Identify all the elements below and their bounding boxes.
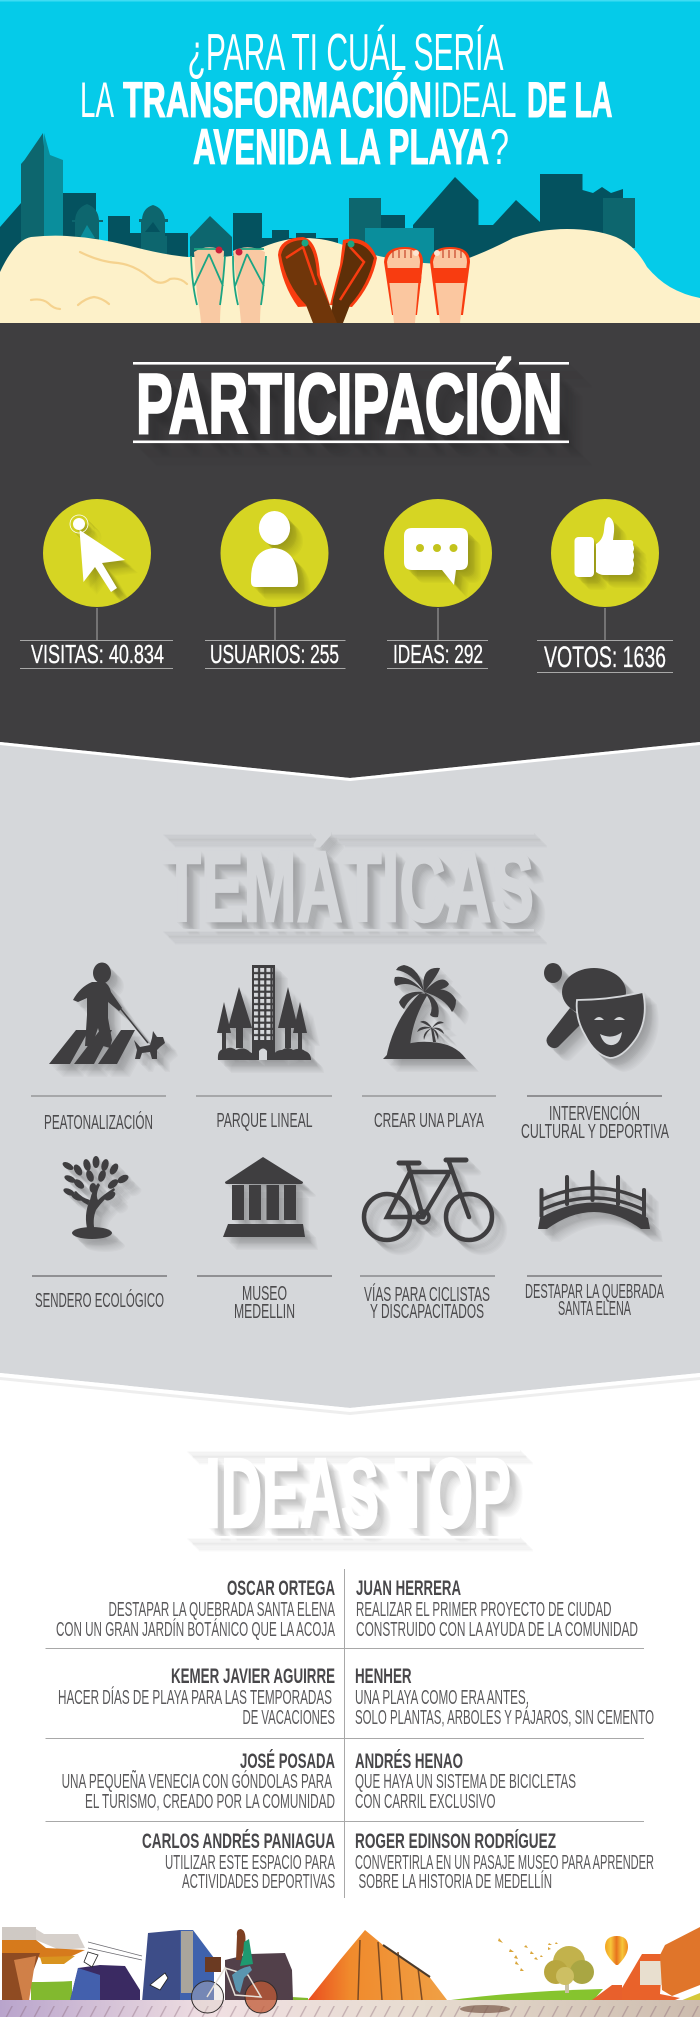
stat: visitas — [20, 499, 173, 669]
sand ripples — [31, 252, 187, 309]
idea: henher: HENHER — [355, 1665, 412, 1688]
orange building — [308, 1930, 447, 2000]
feet: red sandals — [384, 247, 470, 323]
topic: museo medellín: MEDELLIN — [234, 1301, 295, 1323]
idea: josé posada — [62, 1750, 335, 1813]
topic: peatonalización: PEATONALIZACIÓN — [44, 1111, 153, 1134]
orange buildings right — [588, 1927, 700, 2010]
panel: participación background — [0, 323, 700, 778]
topic: vías para ciclistas — [360, 1160, 495, 1323]
stat: ideas — [384, 499, 492, 669]
icon: palm island — [383, 965, 466, 1059]
section edge shadow — [0, 1378, 700, 1413]
icon: cursor — [70, 515, 125, 592]
idea: oscar ortega: CON UN GRAN JARDÍN BOTÁNICO QUE LA ACOJA — [56, 1618, 335, 1641]
idea: oscar ortega: DESTAPAR LA QUEBRADA SANTA ELENA — [108, 1599, 335, 1621]
icon: tower with trees — [217, 965, 311, 1060]
idea: kemer javier aguirre: HACER DÍAS DE PLAYA PARA LAS TEMPORADAS — [58, 1686, 332, 1709]
grass — [31, 1981, 603, 2008]
stat: ideas: IDEAS: 292 — [393, 639, 483, 669]
hot air balloon — [605, 1936, 628, 1965]
idea: andrés henao: CON CARRIL EXCLUSIVO — [355, 1791, 496, 1813]
idea: henher: UNA PLAYA COMO ERA ANTES, — [355, 1687, 529, 1709]
title question: ? — [490, 119, 509, 175]
topic: sendero ecológico: SENDERO ECOLÓGICO — [35, 1289, 164, 1312]
idea: carlos andrés paniagua — [142, 1830, 335, 1893]
topic: parque lineal: PARQUE LINEAL — [216, 1110, 312, 1132]
panel: ideas table grid — [46, 1569, 644, 1898]
title question: LA — [80, 72, 114, 128]
idea: carlos andrés paniagua: UTILIZAR ESTE ESPACIO PARA — [165, 1852, 335, 1874]
topic: intervención cultural y deportiva — [521, 963, 669, 1143]
idea: kemer javier aguirre: KEMER JAVIER AGUIRRE — [171, 1665, 335, 1688]
illustration: city collage footer — [0, 1927, 700, 2017]
topic: parque lineal — [196, 965, 332, 1132]
cobblestone ground — [0, 2000, 700, 2017]
idea: kemer javier aguirre: DE VACACIONES — [242, 1707, 335, 1729]
topic: vías para ciclistas: VÍAS PARA CICLISTAS — [364, 1283, 490, 1306]
topic: vías para ciclistas: Y DISCAPACITADOS — [370, 1301, 484, 1323]
tree — [544, 1946, 594, 1993]
topic: crear una playa — [362, 965, 496, 1132]
title question: IDEAL — [433, 72, 516, 128]
icon: pedestrian with dog — [49, 962, 165, 1064]
topic: destapar la quebrada — [525, 1172, 664, 1320]
topic: sendero ecológico — [32, 1156, 167, 1312]
title question: DE LA — [527, 72, 612, 128]
sand dunes — [0, 229, 700, 323]
stat: usuarios: USUARIOS: 255 — [210, 639, 339, 669]
blue rocks — [69, 1930, 293, 2005]
topic: crear una playa: CREAR UNA PLAYA — [374, 1110, 484, 1132]
idea: kemer javier aguirre — [58, 1665, 335, 1729]
idea: carlos andrés paniagua: ACTIVIDADES DEPORTIVAS — [182, 1871, 335, 1893]
title question: TRANSFORMACIÓN — [123, 72, 432, 128]
icon: museum — [223, 1157, 305, 1237]
concrete structure — [2, 1927, 85, 2007]
idea: josé posada: UNA PEQUEÑA VENECIA CON GÓNDOLAS PARA — [62, 1769, 332, 1793]
panel: header beach scene — [0, 0, 700, 323]
topic: peatonalización — [31, 962, 166, 1134]
idea: henher — [355, 1665, 654, 1729]
idea: josé posada: JOSÉ POSADA — [240, 1750, 335, 1773]
icon: bridge — [538, 1172, 650, 1229]
idea: juan herrera: JUAN HERRERA — [356, 1577, 461, 1600]
idea: juan herrera — [356, 1577, 638, 1641]
topic: museo medellín — [197, 1157, 332, 1323]
icon: tree — [61, 1156, 130, 1239]
icon: paddle and mask — [544, 963, 645, 1058]
birds — [498, 1938, 558, 1971]
icon: chat bubble — [404, 528, 468, 585]
icon: user — [251, 511, 298, 587]
idea: andrés henao — [355, 1750, 576, 1813]
idea: oscar ortega: OSCAR ORTEGA — [227, 1577, 335, 1600]
idea: josé posada: EL TURISMO, CREADO POR LA COMUNIDAD — [85, 1791, 335, 1813]
woman on bicycle — [192, 1929, 277, 2013]
icon: thumbs up — [574, 517, 634, 577]
topic: museo medellín: MUSEO — [242, 1283, 287, 1305]
idea: andrés henao: ANDRÉS HENAO — [355, 1750, 463, 1773]
panel: temáticas background — [0, 730, 700, 1408]
panel edge white stripe — [0, 744, 700, 780]
idea: roger edinson rodríguez: ROGER EDINSON RODRÍGUEZ — [355, 1830, 556, 1853]
topic: destapar la quebrada: SANTA ELENA — [558, 1298, 631, 1320]
stat: votos — [537, 499, 673, 674]
stat: usuarios — [205, 499, 346, 669]
feet: orange flip flops — [278, 237, 377, 323]
idea: roger edinson rodríguez: SOBRE LA HISTORIA DE MEDELLÍN — [358, 1870, 552, 1893]
title question: AVENIDA LA PLAYA — [193, 119, 489, 175]
title question — [80, 24, 612, 175]
section edge white stripe — [0, 1375, 700, 1410]
city skyline — [0, 133, 635, 300]
idea: carlos andrés paniagua: CARLOS ANDRÉS PANIAGUA — [142, 1830, 335, 1853]
idea: oscar ortega — [56, 1577, 335, 1641]
stat: visitas: VISITAS: 40.834 — [31, 639, 164, 669]
feet: green flip flops — [191, 246, 266, 323]
icon: bicycle — [364, 1160, 492, 1240]
idea: roger edinson rodríguez — [355, 1830, 654, 1893]
topic: intervención cultural y deportiva: INTERVENCIÓN — [549, 1102, 640, 1125]
